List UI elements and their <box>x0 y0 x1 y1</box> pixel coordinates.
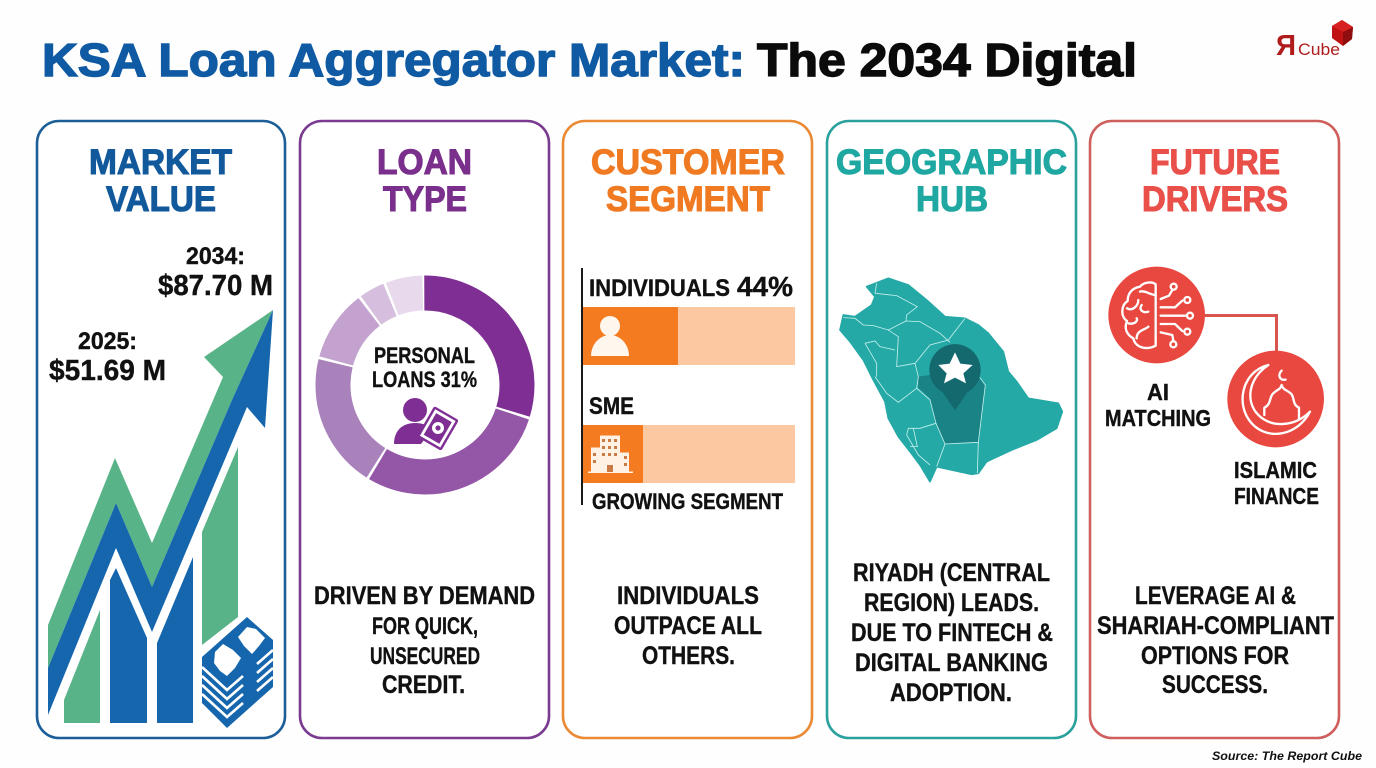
heading: loan type <box>377 143 472 219</box>
label: AI matching: AI <box>1147 379 1169 405</box>
label: AI matching: MATCHING <box>1105 405 1211 431</box>
label: 2025 value: $51.69 M <box>49 355 166 387</box>
panel: geographic hub <box>827 121 1076 738</box>
label: individuals 44%: INDIVIDUALS <box>589 275 730 302</box>
description text: DRIVEN BY DEMAND <box>314 582 535 610</box>
description text: INDIVIDUALS <box>617 582 759 610</box>
label: 2034 value: $87.70 M <box>158 270 273 302</box>
description text: DUE TO FINTECH & <box>851 619 1053 647</box>
donut label: PERSONAL <box>374 343 475 368</box>
heading: customer segment <box>591 143 785 219</box>
connector line <box>1205 316 1276 352</box>
heading: geographic hub: HUB <box>916 180 988 219</box>
heading: market value: MARKET <box>89 143 232 182</box>
label: SME: SME <box>589 393 634 420</box>
label: 2034 value: 2034: <box>186 243 245 270</box>
description text: RIYADH (CENTRAL <box>853 559 1050 587</box>
icon: money stack <box>202 617 273 728</box>
heading: loan type: TYPE <box>383 180 467 219</box>
heading: future drivers <box>1142 143 1288 219</box>
source note: Source: The Report Cube <box>1212 749 1362 763</box>
heading: loan type: LOAN <box>377 143 472 182</box>
label: individuals 44% <box>589 271 793 302</box>
label: AI matching <box>1105 379 1211 431</box>
description text <box>1097 582 1334 699</box>
description text <box>851 559 1053 707</box>
heading: customer segment: SEGMENT <box>606 180 770 219</box>
heading: market value: VALUE <box>106 180 216 219</box>
logo: RCube <box>1276 20 1353 62</box>
label: individuals 44%: 44% <box>737 271 793 302</box>
panel: loan type <box>300 121 549 738</box>
description text: OPTIONS FOR <box>1141 642 1289 670</box>
bar: SME <box>583 425 795 483</box>
heading: geographic hub <box>836 143 1067 219</box>
description text: SHARIAH-COMPLIANT <box>1097 612 1334 640</box>
title <box>42 34 1137 86</box>
description text: UNSECURED <box>370 643 480 670</box>
description text: ADOPTION. <box>890 679 1012 707</box>
label: 2034 value <box>158 243 273 302</box>
heading: geographic hub: GEOGRAPHIC <box>836 143 1067 182</box>
heading: market value <box>89 143 232 219</box>
panel: customer segment <box>563 121 812 738</box>
bar chart: segments <box>581 268 795 514</box>
description text <box>614 582 762 670</box>
label: 2025 value <box>49 328 166 387</box>
icon: AI brain <box>1108 267 1205 363</box>
label: 2025 value: 2025: <box>78 328 137 355</box>
panel: market value <box>37 121 285 738</box>
description text: OUTPACE ALL <box>614 612 762 640</box>
description text: LEVERAGE AI & <box>1135 582 1296 610</box>
label: Islamic finance: ISLAMIC <box>1234 457 1317 483</box>
logo: RCube: Cube <box>1298 40 1340 59</box>
bar chart with growth arrow <box>48 310 273 723</box>
label: growing segment: GROWING SEGMENT <box>592 489 783 514</box>
description text: OTHERS. <box>642 642 735 670</box>
heading: customer segment: CUSTOMER <box>591 143 785 182</box>
donut label: LOANS 31% <box>372 367 477 392</box>
map: Saudi Arabia with Riyadh pin <box>840 278 1062 482</box>
icon: crescent and mosque <box>1227 351 1324 447</box>
description text: REGION) LEADS. <box>864 589 1039 617</box>
bar: individuals <box>583 307 795 365</box>
description text: FOR QUICK, <box>372 613 478 640</box>
heading: future drivers: FUTURE <box>1150 143 1280 182</box>
heading: future drivers: DRIVERS <box>1142 180 1288 219</box>
icon: person with banknote <box>394 398 457 449</box>
description text <box>314 582 535 699</box>
description text: SUCCESS. <box>1162 671 1268 699</box>
label: Islamic finance: FINANCE <box>1234 483 1319 509</box>
description text: DIGITAL BANKING <box>855 649 1048 677</box>
panel: future drivers <box>1090 121 1339 738</box>
logo: RCube: Я <box>1276 30 1296 62</box>
donut chart <box>333 293 517 477</box>
title: KSA Loan Aggregator Market: <box>42 34 745 86</box>
label: Islamic finance <box>1234 457 1319 509</box>
description text: CREDIT. <box>382 671 465 699</box>
donut label <box>372 343 477 392</box>
title: The 2034 Digital <box>757 34 1137 86</box>
